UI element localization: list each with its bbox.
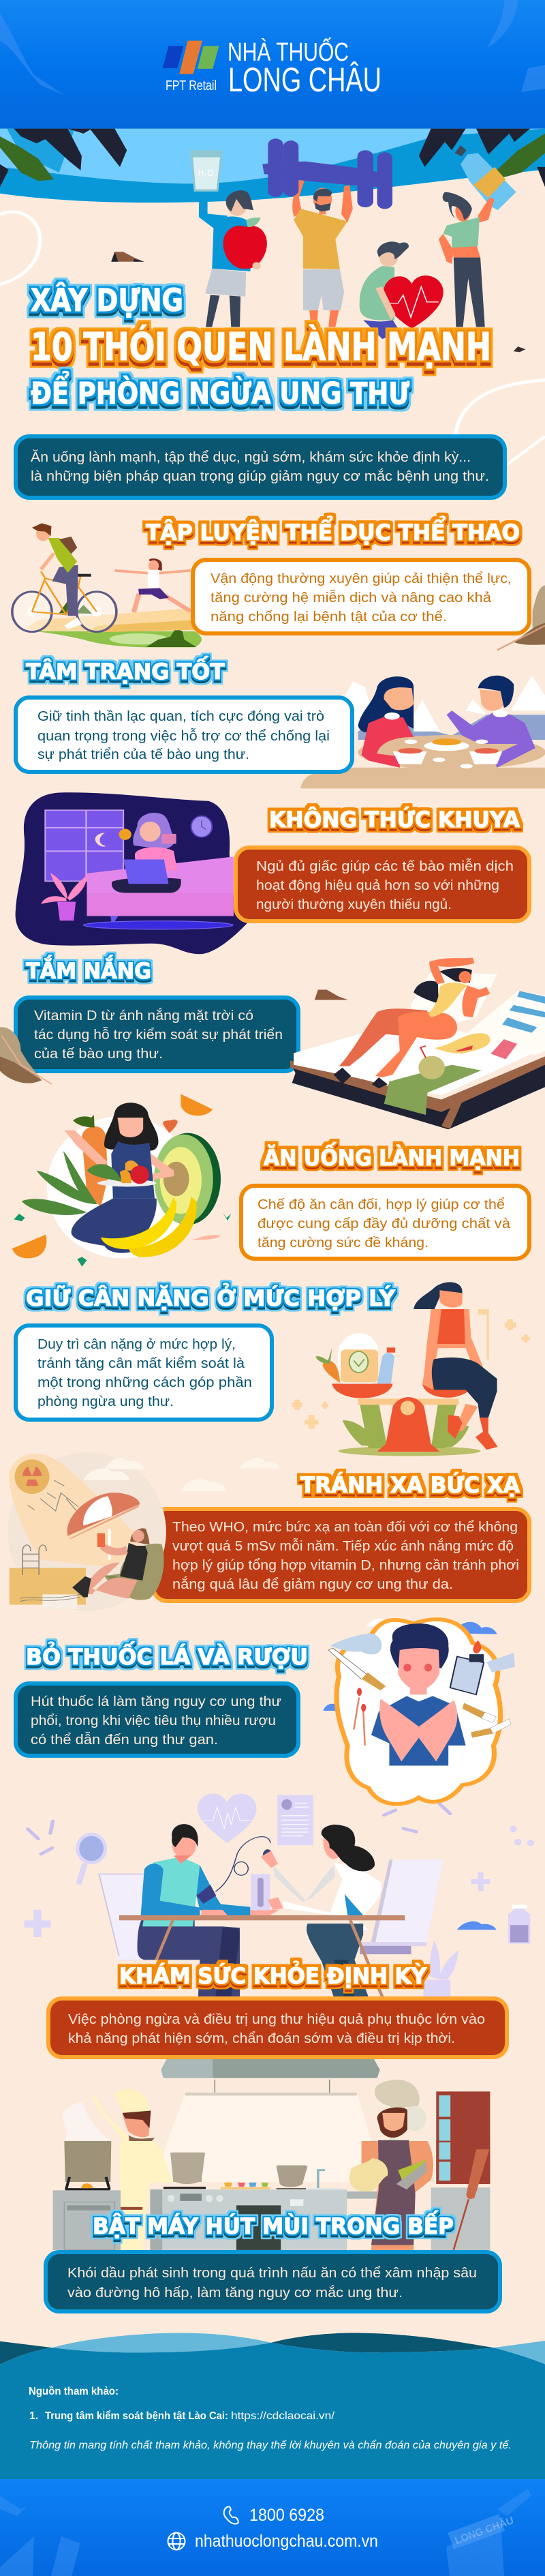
icon: globe — [168, 2532, 185, 2550]
illustration: man refusing cigarettes — [323, 1619, 515, 1930]
panel: no late nights: hoạt động hiệu quả hơn so với những — [256, 878, 499, 893]
panel: healthy weight: tránh tăng cân mất kiểm soát là — [37, 1356, 245, 1371]
logo: FPT Retail Long Châu: LONG CHÂU — [228, 61, 382, 99]
icon: bananas — [101, 1197, 197, 1257]
icon: patient — [138, 1824, 280, 1997]
icon: man — [447, 676, 535, 768]
clouds — [323, 1619, 497, 1711]
panel: good mood — [16, 698, 352, 772]
icon: yoga woman — [114, 558, 191, 612]
icon: chairs — [99, 1859, 458, 1997]
heading: no late nights: KHÔNG THỨC KHUYA — [269, 806, 520, 833]
icon: chef right upper — [362, 2080, 435, 2182]
references: https://cdclaocai.vn/ — [231, 2410, 335, 2422]
panel: exercise — [193, 560, 529, 633]
panel: healthy weight: một trong những cách góp phần — [37, 1375, 252, 1390]
title: XÂY DỰNG — [31, 282, 183, 318]
panel: kitchen hood: vào đường hô hấp, làm tăng nguy cơ mắc ung thư. — [67, 2285, 403, 2301]
icon: counters — [53, 2170, 490, 2250]
icon: leaf — [0, 1027, 52, 1084]
panel: sunbathing: Vitamin D từ ánh nắng mặt trời có — [34, 1008, 253, 1023]
panel: regular check-up: khả năng phát hiện sớm, chẩn đoán sớm và điều trị kịp thời. — [68, 2031, 455, 2046]
person with glass and apple: H₂O — [198, 168, 214, 178]
icon: range hood — [153, 2058, 382, 2182]
heading: healthy weight: GIỮ CÂN NẶNG Ở MỨC HỢP LÝ — [26, 1283, 396, 1311]
icon: avocado — [154, 1133, 221, 1225]
illustration: weight scale and woman — [292, 1309, 530, 1456]
icon: radiation arrows — [28, 1480, 78, 1511]
icon: seesaw — [332, 1383, 474, 1452]
logo: FPT Retail Long Châu: NHÀ THUỐC — [228, 36, 349, 67]
icon: carrot and leaves — [22, 1115, 108, 1215]
panel: exercise: Vận động thường xuyên giúp cải thiện thể lực, — [211, 571, 512, 586]
panel: regular check-up: Việc phòng ngừa và điều trị ung thư hiệu quả phụ thuộc lớn vào — [68, 2012, 485, 2027]
panel: good mood: Giữ tinh thần lạc quan, tích cực đóng vai trò — [37, 709, 324, 724]
footer waves and references background — [0, 2333, 545, 2479]
illustration: cyclist and yoga woman — [12, 523, 202, 647]
icon: chef left upper — [63, 2089, 172, 2182]
palm leaves right — [419, 129, 545, 187]
panel: healthy weight: phòng ngừa ung thư. — [37, 1394, 174, 1409]
icon: lower clouds — [343, 1921, 497, 1930]
icon: umbrella — [67, 1493, 140, 1559]
icon: door — [436, 2091, 490, 2182]
intro panel — [16, 436, 505, 498]
heading: healthy eating: ĂN UỐNG LÀNH MẠNH — [264, 1141, 520, 1171]
faint shop sign: LONG CHÂU — [453, 2514, 515, 2547]
illustration: sun radiation and umbrella — [7, 1452, 279, 1611]
icon: dishes — [393, 738, 502, 768]
contact footer band — [0, 2479, 545, 2576]
panel: avoid radiation: vượt quá 5 mSv mỗi năm. Tiếp xúc ánh nắng mức độ — [172, 1538, 514, 1554]
icon: cigarette butts — [463, 1703, 511, 1738]
panel: healthy eating: được cung cấp đầy đủ dưỡng chất và — [258, 1216, 511, 1231]
panel: quit smoking and alcohol: phổi, trong khi việc tiêu thụ nhiều rượu — [31, 1713, 276, 1728]
title — [31, 282, 491, 411]
person with glass and apple — [190, 150, 267, 327]
icon: scale, carrot, bottle — [315, 1333, 395, 1383]
heading: exercise: TẬP LUYỆN THỂ DỤC THỂ THAO — [146, 516, 520, 545]
panel: kitchen hood — [46, 2252, 500, 2311]
illustration: kitchen hood and chefs — [53, 2058, 490, 2251]
icon: sofa — [83, 856, 234, 929]
heading: regular check-up: KHÁM SỨC KHỎE ĐỊNH KỲ — [119, 1960, 427, 1989]
references — [29, 2386, 512, 2451]
icon: man's face — [390, 1623, 449, 1694]
references: Trung tâm kiểm soát bệnh tật Lào Cai: — [45, 2410, 228, 2422]
faint shop and buildings — [0, 2489, 531, 2576]
icon: pool — [10, 1545, 86, 1609]
icon: dumbbell — [262, 138, 393, 209]
icon: cupcakes — [221, 2183, 270, 2189]
panel: healthy eating: tăng cường sức đề kháng. — [258, 1235, 429, 1250]
icon: plate with vegetables — [87, 1160, 157, 1186]
icon: cyclist — [12, 523, 116, 632]
icon: doctor — [119, 1825, 405, 1997]
palm leaves left — [0, 129, 127, 187]
icon: sunbathing woman — [339, 958, 490, 1077]
panel: good mood: sự phát triển của tế bào ung thư. — [37, 747, 249, 762]
icon: woman in beanbag — [72, 1528, 164, 1600]
panel: good mood: quan trọng trong việc hỗ trợ cơ thể chống lại — [37, 728, 330, 744]
panel: avoid radiation: Theo WHO, mức bức xạ an toàn đối với cơ thể không — [172, 1520, 518, 1535]
heading: quit smoking and alcohol: BỎ THUỐC LÁ VÀ RƯỢU — [26, 1641, 308, 1670]
references: Nguồn tham khảo: — [29, 2386, 119, 2397]
hero illustration: beach and four people — [0, 129, 545, 436]
panel: quit smoking and alcohol — [16, 1683, 298, 1756]
icon: woman's head — [414, 1282, 463, 1309]
icon: blood pressure meter — [215, 1837, 272, 1911]
icon: lounger — [290, 972, 545, 1129]
icon: blue shirt and crossed arms — [371, 1696, 466, 1765]
panel: exercise: năng chống lại bệnh tật của cơ thể. — [211, 610, 447, 625]
woman with sports bottle — [439, 145, 516, 327]
panel: healthy weight: Duy trì cân nặng ở mức hợp lý, — [37, 1337, 236, 1352]
icon: floating medical items — [25, 1793, 534, 1944]
panel: sunbathing: của tế bào ung thư. — [34, 1047, 163, 1062]
phone number: 1800 6928 — [249, 2506, 324, 2525]
icon: window — [45, 810, 123, 881]
intro panel: Ăn uống lành mạnh, tập thể dục, ngủ sớm, khám sức khỏe định kỳ... — [31, 449, 471, 465]
sky and sea — [0, 129, 545, 203]
panel: avoid radiation — [153, 1509, 529, 1601]
heading: avoid radiation: TRÁNH XA BỨC XẠ — [300, 1471, 520, 1498]
icon: pots upper — [64, 2144, 306, 2182]
icon: plants — [343, 1404, 469, 1448]
icon: lighter — [450, 1641, 515, 1694]
references: 1. — [29, 2410, 38, 2422]
ring continuation — [508, 436, 545, 464]
icon: woman at laptop — [112, 813, 181, 893]
illustration: couple eating — [300, 676, 545, 788]
clouds — [83, 1458, 279, 1491]
heading: good mood: TÂM TRẠNG TỐT — [26, 655, 225, 685]
icon: rock — [315, 989, 348, 1000]
references: Thông tin mang tính chất tham khảo, không thay thế lời khuyên và chẩn đoán của chuyên gia y tế. — [29, 2439, 512, 2451]
icon: sitting woman — [422, 1309, 498, 1450]
rocks — [111, 252, 525, 352]
panel: regular check-up — [48, 1998, 507, 2057]
decorative rings — [0, 212, 545, 436]
leaf decoration right — [497, 585, 545, 650]
logo: FPT Retail Long Châu — [163, 36, 382, 99]
icon: chef left lower — [120, 2141, 174, 2251]
icon: chef right lower — [349, 2141, 433, 2250]
panel: avoid radiation: nắng quá lâu để giảm nguy cơ ung thư da. — [172, 1576, 453, 1592]
intro panel: là những biện pháp quan trọng giúp giảm nguy cơ mắc bệnh ung thư. — [31, 468, 489, 484]
icon: smoke, cigarette and matches — [328, 1634, 386, 1746]
panel: avoid radiation: hợp lý giúp tổng hợp vitamin D, nhưng cần tránh phơi — [172, 1558, 519, 1573]
icon: clock — [191, 816, 212, 837]
icon: phone — [224, 2506, 238, 2523]
plus signs — [292, 1309, 530, 1429]
illustration: health check-up — [25, 1793, 534, 1997]
icon: plant — [41, 873, 87, 920]
panel: sunbathing — [16, 998, 298, 1071]
icon: door lower — [436, 2141, 490, 2250]
website: nhathuoclongchau.com.vn — [195, 2532, 378, 2551]
logo: FPT Retail Long Châu: FPT Retail — [166, 78, 217, 93]
panel: no late nights — [236, 848, 529, 921]
illustration: night room — [16, 792, 247, 954]
panel: quit smoking and alcohol: Hút thuốc lá làm tăng nguy cơ ung thư — [31, 1694, 281, 1709]
heading: sunbathing: TẮM NẮNG — [26, 955, 151, 984]
panel: healthy weight — [16, 1326, 272, 1420]
icon: hat, coconut and player — [418, 1033, 517, 1079]
icon: radiation sun — [14, 1459, 49, 1494]
panel: exercise: tăng cường hệ miễn dịch và nâng cao khả — [211, 590, 492, 605]
illustration: woman with healthy food — [12, 1094, 231, 1267]
icon: badge background — [337, 1619, 501, 1804]
panel: no late nights: Ngủ đủ giấc giúp các tế bào miễn dịch — [256, 858, 514, 874]
panel: sunbathing: tác dụng hỗ trợ kiểm soát sự phát triển — [34, 1027, 283, 1043]
sitting woman with heart — [360, 241, 443, 339]
icon: oranges — [12, 1094, 213, 1258]
sprouts — [14, 1212, 231, 1267]
panel: healthy eating: Chế độ ăn cân đối, hợp lý giúp cơ thể — [258, 1197, 505, 1212]
title: ĐỂ PHÒNG NGỪA UNG THƯ — [31, 370, 409, 411]
header band — [0, 0, 545, 129]
panel: no late nights: người thường xuyên thiếu ngủ. — [256, 897, 452, 912]
panel: quit smoking and alcohol: có thể dẫn đến ung thư gan. — [31, 1732, 218, 1748]
icon: FPT bars — [163, 41, 219, 74]
icon: woman — [64, 1103, 221, 1253]
illustration: leaf and sun lounger — [0, 958, 545, 1129]
icon: pots lower — [64, 2141, 308, 2190]
icon: woman — [358, 676, 414, 768]
panel: kitchen hood: Khói dầu phát sinh trong quá trình nấu ăn có thể xâm nhập sâu — [67, 2266, 477, 2281]
heading: kitchen hood: BẬT MÁY HÚT MÙI TRONG BẾP — [93, 2211, 454, 2239]
panel: healthy eating — [241, 1186, 529, 1259]
man lifting dumbbell — [262, 138, 393, 327]
